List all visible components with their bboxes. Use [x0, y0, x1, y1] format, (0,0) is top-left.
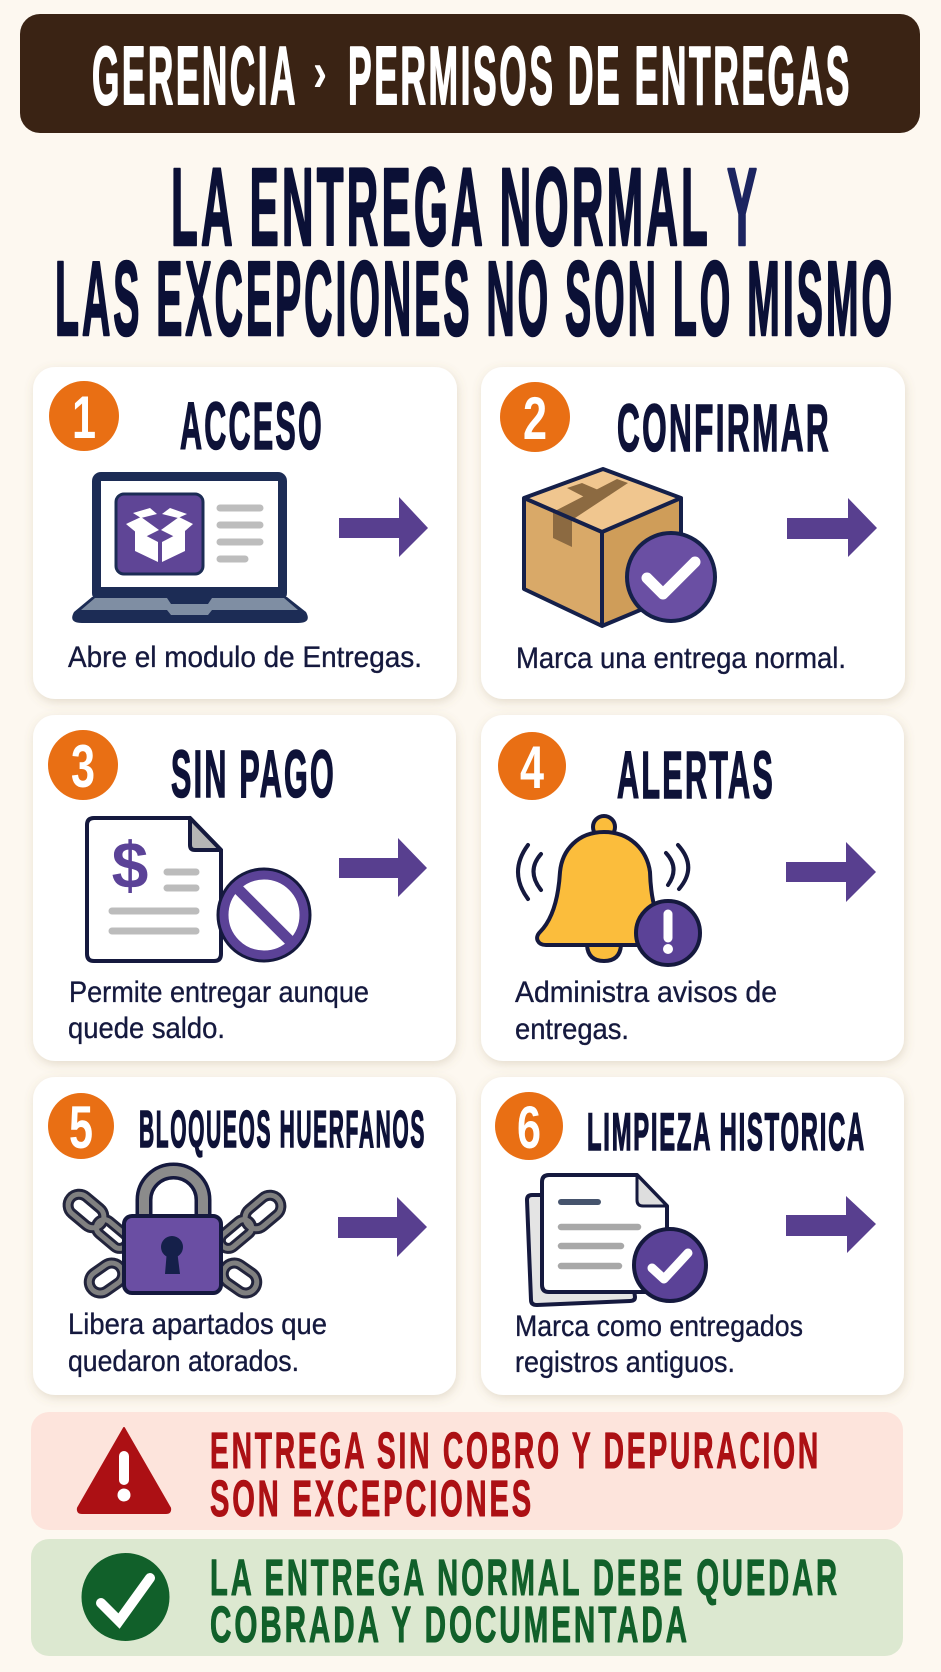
callout: normal delivery rule: [31, 1539, 903, 1656]
panel: step 6 limpieza historica: [481, 1077, 904, 1395]
description: Marca como entregados: [515, 1310, 803, 1343]
badge 4: 4: [520, 735, 544, 802]
icon: warning triangle: [78, 1428, 170, 1513]
description: [515, 976, 777, 1046]
description: Permite entregar aunque: [69, 976, 369, 1009]
description: entregas.: [515, 1013, 629, 1046]
header bar: ›: [313, 40, 327, 103]
callout text: [210, 1549, 840, 1653]
badge 5: [48, 1093, 114, 1162]
badge 3: 3: [71, 734, 95, 801]
arrow: [786, 1196, 876, 1253]
icon: bell with alert: [518, 816, 700, 965]
callout text: [210, 1422, 821, 1527]
badge 4: [498, 732, 566, 802]
description: Libera apartados que: [68, 1308, 327, 1341]
header bar: [20, 14, 920, 133]
description: [68, 976, 369, 1045]
panel: step 5 bloqueos huerfanos: [33, 1077, 456, 1395]
description: [68, 1308, 327, 1378]
badge 3: [48, 730, 118, 801]
panel: step 1 acceso: ACCESO: [180, 389, 324, 464]
icon: documents with check: [527, 1175, 706, 1305]
icon: padlock with chains: [64, 1171, 285, 1297]
badge 2: [500, 382, 570, 453]
badge 1: 1: [72, 385, 96, 452]
arrow: [339, 497, 428, 557]
panel: step 1 acceso: [33, 367, 457, 699]
description: Abre el modulo de Entregas.: [68, 641, 422, 674]
description: registros antiguos.: [515, 1346, 735, 1379]
callout text: SON EXCEPCIONES: [210, 1470, 534, 1527]
icon: box with check: [524, 469, 715, 626]
arrow: [786, 842, 876, 902]
panel: step 3 sin pago: SIN PAGO: [171, 737, 336, 812]
icon: green check: [82, 1553, 170, 1641]
badge 2: 2: [523, 386, 547, 453]
title: Y: [727, 146, 757, 269]
description: quede saldo.: [68, 1012, 225, 1045]
description: [515, 1310, 803, 1379]
description: Administra avisos de: [515, 976, 777, 1009]
badge 6: 6: [517, 1095, 541, 1162]
arrow: [787, 498, 877, 557]
callout: exceptions warning: [31, 1412, 903, 1530]
description: quedaron atorados.: [68, 1345, 299, 1378]
panel: step 2 confirmar: [481, 367, 905, 699]
description: Marca una entrega normal.: [516, 642, 846, 675]
infographic page: BLOQUEOS HUERFANOS: [139, 1101, 426, 1159]
badge 1: [49, 381, 119, 452]
badge 6: [495, 1092, 563, 1162]
icon: invoice with prohibition: [87, 818, 310, 961]
header bar: GERENCIA: [92, 29, 298, 122]
panel: step 3 sin pago: [33, 715, 456, 1061]
arrow: [339, 838, 427, 897]
title: [55, 146, 895, 358]
panel: step 4 alertas: [481, 715, 904, 1061]
arrow: [338, 1197, 427, 1257]
badge 5: 5: [69, 1095, 93, 1162]
icon: laptop with box: [72, 472, 308, 623]
icon: invoice with prohibition: $: [112, 828, 148, 902]
